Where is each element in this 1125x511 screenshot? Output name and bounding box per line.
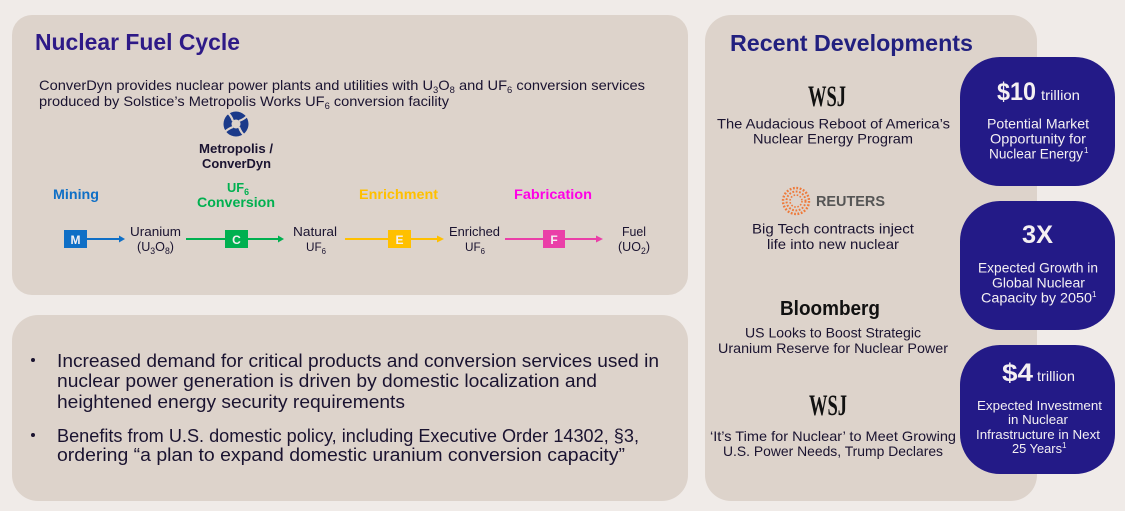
headline: Big Tech: life into new nuclear xyxy=(767,236,899,252)
text: Natural UF6: Natural xyxy=(293,224,337,239)
text: Enriched UF6: 6 xyxy=(481,247,486,256)
stat card: $4 trillion: 1 xyxy=(1062,441,1067,450)
headline: Uranium Reserve xyxy=(718,324,948,356)
label: Enrichment: Enrichment xyxy=(359,186,438,202)
text: Uranium xyxy=(130,224,181,256)
headline: Audacious Reboot xyxy=(717,116,950,146)
label: Mining: Mining xyxy=(53,186,99,202)
stat card: $10 trillion xyxy=(960,57,1115,186)
text: Fuel UO2: 2 xyxy=(641,246,646,256)
stat card: $4 trillion: $4 xyxy=(1002,359,1033,387)
stat card: 3X: 1 xyxy=(1092,290,1097,299)
logo: Bloomberg: Bloomberg xyxy=(780,298,880,320)
text block: intro: produced by Solstice’s Metropolis Works UF xyxy=(39,93,313,109)
text block: intro: 6 xyxy=(507,85,512,95)
label: UF6 Conversion: Conversion xyxy=(197,194,275,210)
heading: Recent Developments: Recent Developments xyxy=(730,30,973,56)
label: Metropolis / ConverDyn: Metropolis / xyxy=(199,141,273,156)
stat card: 3X: 3X xyxy=(1022,221,1053,249)
text: Uranium: (U xyxy=(137,239,151,254)
bullet: domestic policy: Benefits from U.S. domestic policy, including Executive Order 14302, §3, xyxy=(57,426,639,446)
text: Fuel UO2: Fuel xyxy=(622,224,646,239)
stat card: 3X: Expected Growth in xyxy=(978,260,1098,276)
text: Natural UF6: UF xyxy=(306,240,322,254)
headline: Time for Nuclear xyxy=(710,428,956,459)
headline: Uranium Reserve: Uranium Reserve for Nuclear Power xyxy=(718,340,948,356)
panel: key points xyxy=(12,315,688,501)
text: Uranium: 8 xyxy=(165,246,170,256)
headline: Time for Nuclear: U.S. Power Needs, Trump Declares xyxy=(723,443,943,459)
stat card: $10 trillion: Potential Market xyxy=(987,116,1089,132)
stat card: $10 trillion: $10 xyxy=(997,78,1036,106)
stat card: 3X: Global Nuclear xyxy=(992,274,1085,290)
text: Uranium: ) xyxy=(170,239,174,254)
text: Uranium: Uranium xyxy=(130,224,181,239)
text block: intro: and UF xyxy=(455,77,507,93)
label: Metropolis / ConverDyn xyxy=(199,141,273,171)
headline: Big Tech xyxy=(752,220,914,252)
logo: Reuters: REUTERS xyxy=(816,193,885,210)
text: Enriched UF6: UF xyxy=(465,240,481,254)
label: UF6 Conversion xyxy=(197,180,275,210)
headline: Audacious Reboot: Nuclear Energy Program xyxy=(753,130,913,146)
heading: Nuclear Fuel Cycle: Nuclear Fuel Cycle xyxy=(35,29,240,55)
bullet: domestic policy xyxy=(31,426,639,465)
step: conversion arrow xyxy=(186,230,284,248)
label: UF6 Conversion: UF xyxy=(227,180,244,195)
text block: intro: O xyxy=(438,77,450,93)
stat card: 3X xyxy=(960,201,1115,330)
text: Fuel UO2 xyxy=(618,224,650,256)
step: fabrication arrow xyxy=(505,230,603,248)
headline: Big Tech: Big Tech contracts inject xyxy=(752,220,914,236)
bullet: increased demand xyxy=(31,351,659,412)
step: mining arrow xyxy=(64,230,125,248)
logo: Reuters xyxy=(783,188,885,214)
stat card: $4 trillion: 25 Years xyxy=(1012,441,1062,456)
text: Uranium: O xyxy=(155,239,165,254)
text block: intro: 3 xyxy=(433,85,438,95)
bullet: increased demand: heightened energy security requirements xyxy=(57,392,405,412)
label: Fabrication: Fabrication xyxy=(514,186,592,202)
stat card: $4 trillion: in Nuclear xyxy=(1008,412,1069,427)
logo: WSJ: WSJ xyxy=(808,80,846,113)
icon: Metropolis pinwheel xyxy=(223,111,249,137)
stat card: $4 trillion: trillion xyxy=(1037,368,1075,384)
step: conversion arrow: C xyxy=(232,233,241,247)
text: Uranium: 3 xyxy=(150,246,155,256)
step: enrichment arrow: E xyxy=(395,233,404,247)
stat card: $10 trillion: Opportunity for xyxy=(990,130,1086,146)
stat card: $4 trillion: Infrastructure in Next xyxy=(976,427,1100,442)
text block: intro: conversion services xyxy=(512,77,645,93)
label: Metropolis / ConverDyn: ConverDyn xyxy=(202,156,271,171)
text: Natural UF6 xyxy=(293,224,337,256)
bullet: increased demand: nuclear power generation is driven by domestic localization and xyxy=(57,371,597,391)
label: UF6 Conversion: 6 xyxy=(244,187,249,197)
bullet: increased demand: Increased demand for critical products and conversion services used in xyxy=(57,351,659,371)
text block: intro: ConverDyn provides nuclear power plants and utilities with U xyxy=(39,77,416,93)
text: Enriched UF6: Enriched xyxy=(449,224,500,239)
text block: intro: 8 xyxy=(450,85,455,95)
logo: WSJ: WSJ xyxy=(809,389,847,422)
text block: intro: conversion facility xyxy=(330,93,449,109)
stat card: $4 trillion: Expected Investment xyxy=(977,398,1102,413)
headline: Audacious Reboot: The Audacious Reboot of America’s xyxy=(717,116,950,132)
text block: intro: 6 xyxy=(325,101,330,111)
step: mining arrow: M xyxy=(70,233,80,247)
stat card: $4 trillion xyxy=(960,345,1115,474)
text: Fuel UO2: (UO xyxy=(618,239,642,254)
bullet: domestic policy: ordering “a plan to expand domestic uranium conversion capacity” xyxy=(57,445,625,465)
text block: intro xyxy=(39,77,645,111)
text: Enriched UF6 xyxy=(449,224,500,256)
text: Fuel UO2: ) xyxy=(646,239,650,254)
step: fabrication arrow: F xyxy=(550,233,558,247)
stat card: $10 trillion: Nuclear Energy xyxy=(989,146,1083,162)
headline: Uranium Reserve: US Looks to Boost Strategic xyxy=(745,324,921,340)
step: enrichment arrow xyxy=(345,230,444,248)
text: Natural UF6: 6 xyxy=(322,247,327,256)
stat card: $10 trillion: trillion xyxy=(1041,87,1080,103)
panel: nuclear fuel cycle xyxy=(12,15,688,295)
stat card: $10 trillion: 1 xyxy=(1084,146,1089,155)
stat card: 3X: Capacity by 2050 xyxy=(981,290,1092,306)
headline: Time for Nuclear: ‘It’s Time for Nuclear’ to Meet Growing xyxy=(710,428,956,444)
panel: recent developments xyxy=(705,15,1037,501)
